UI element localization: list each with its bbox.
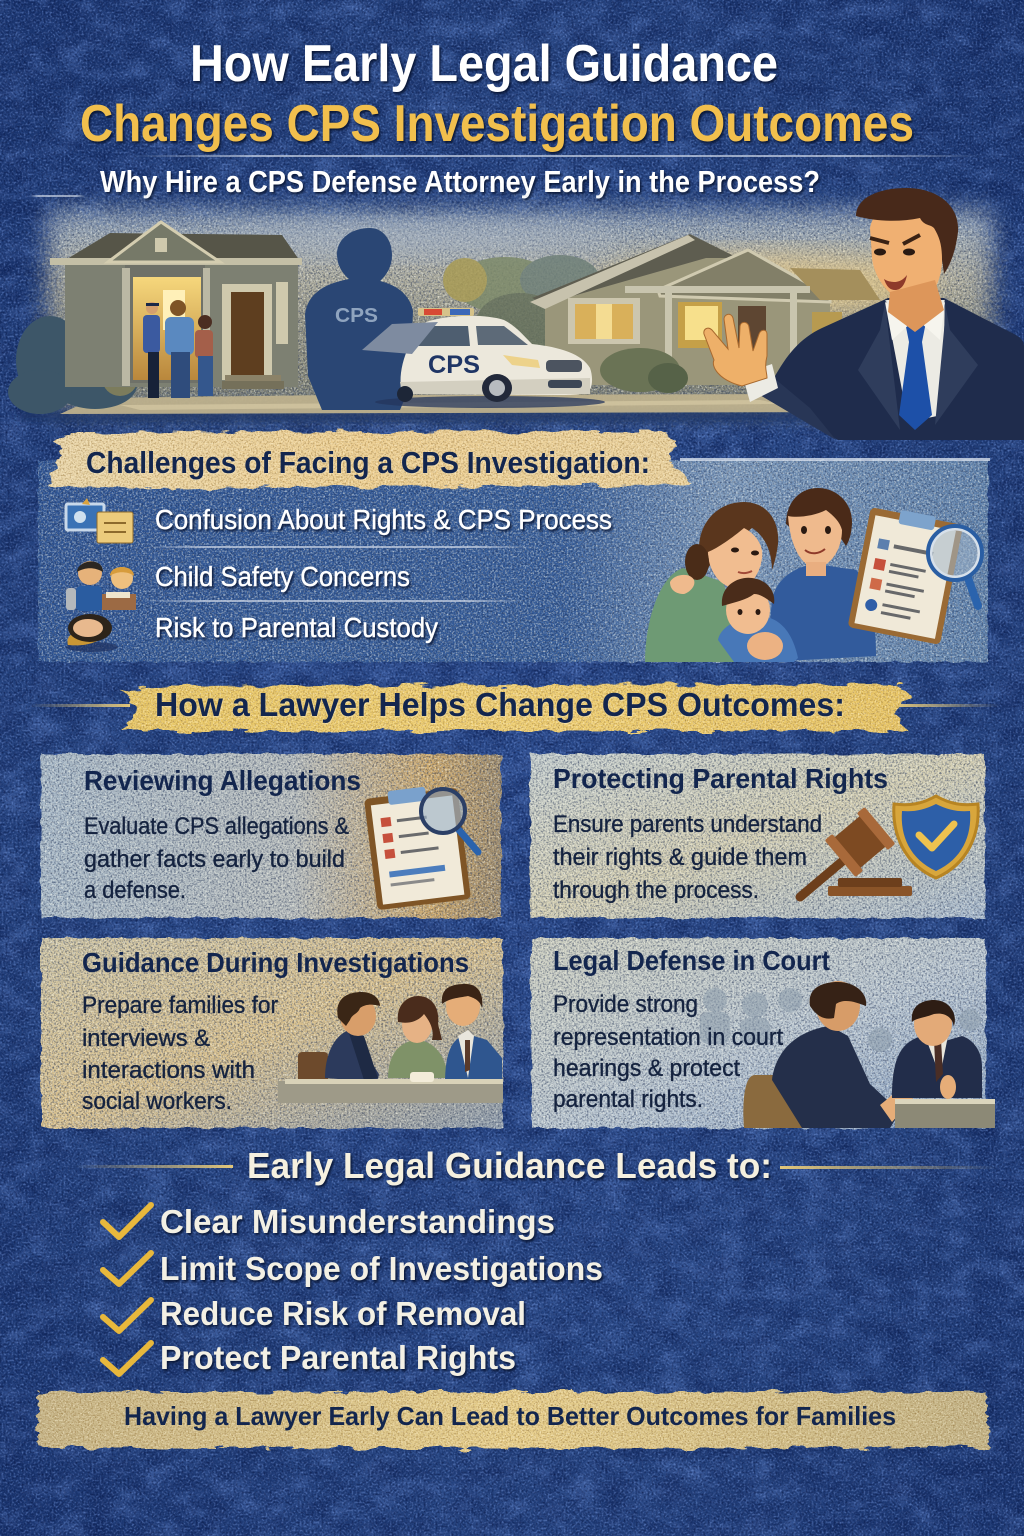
mother: [645, 502, 778, 662]
bushes left: [8, 316, 138, 414]
checklist of outcomes: [103, 1203, 603, 1376]
icon: parent and child: [66, 561, 136, 611]
card body: parental rights.: [553, 1086, 703, 1113]
card body: interactions with: [82, 1057, 255, 1084]
title: How Early Legal Guidance: [190, 35, 778, 93]
card body: a defense.: [84, 877, 186, 904]
icon: documents: [66, 498, 133, 543]
icon: shield with check: [894, 796, 978, 878]
card: legal defense in court: [531, 938, 995, 1128]
card body: Ensure parents understand: [553, 811, 822, 838]
house right: [530, 234, 880, 393]
card heading: Guidance During Investigations: [82, 947, 469, 978]
panel: challenges: [38, 431, 990, 662]
icon: clipboard with magnifier: [363, 783, 478, 910]
how a lawyer helps banner: How a Lawyer Helps Change CPS Outcomes:: [155, 686, 845, 723]
three figures at the door: [143, 300, 213, 398]
card body: interviews &: [82, 1025, 210, 1052]
hero sky and ground backdrop: [50, 212, 990, 408]
clipboard: [848, 504, 964, 645]
child: [718, 578, 798, 662]
card body: representation in court: [553, 1024, 783, 1051]
card heading: Protecting Parental Rights: [553, 763, 888, 794]
lawyer hand: [704, 314, 767, 386]
card body: [84, 813, 349, 904]
illustration: courtroom scene: [700, 981, 995, 1128]
card heading: Reviewing Allegations: [84, 765, 361, 796]
challenges panel background: [38, 460, 988, 662]
heading: early legal guidance leads to: Early Legal Guidance Leads to:: [247, 1145, 772, 1186]
card body: through the process.: [553, 877, 759, 904]
card body: [553, 991, 783, 1113]
how a lawyer helps banner: [30, 684, 1000, 731]
icon: hat on stand: [66, 614, 118, 652]
challenge list text: Child Safety Concerns: [155, 561, 410, 592]
panel: hero illustration: [8, 188, 1024, 440]
check item: reduce risk: Reduce Risk of Removal: [160, 1295, 526, 1332]
father: [766, 488, 876, 662]
silhouette with CPS label: [305, 228, 413, 410]
trees behind: [443, 255, 600, 357]
card: guidance during investigations: [41, 938, 503, 1128]
challenges banner: Challenges of Facing a CPS Investigation:: [86, 445, 650, 480]
card body: gather facts early to build: [84, 846, 345, 873]
card body: Prepare families for: [82, 992, 278, 1019]
challenge list text: [155, 504, 612, 643]
card body: [82, 992, 278, 1115]
challenges banner: [48, 431, 690, 488]
house left with door and family: [50, 222, 302, 398]
card body: Evaluate CPS allegations &: [84, 813, 349, 840]
challenge list text: Risk to Parental Custody: [155, 612, 438, 643]
lawyer head: [870, 202, 942, 304]
silhouette with CPS label: CPS: [335, 305, 378, 327]
check item: clear misunderstandings: Clear Misunderstandings: [160, 1203, 555, 1240]
card: reviewing allegations: [41, 754, 501, 918]
check item: limit scope: Limit Scope of Investigations: [160, 1250, 603, 1287]
card heading: Legal Defense in Court: [553, 945, 830, 976]
dark ground strip: [20, 410, 840, 422]
footer banner: [38, 1392, 988, 1448]
card body: hearings & protect: [553, 1055, 740, 1082]
CPS car: [362, 308, 605, 408]
challenge list text: Confusion About Rights & CPS Process: [155, 504, 612, 535]
heading: early legal guidance leads to: [75, 1145, 998, 1186]
CPS car: CPS: [428, 351, 480, 379]
card body: their rights & guide them: [553, 844, 807, 871]
card body: Provide strong: [553, 991, 698, 1018]
illustration: lawyers and mother at a table: [278, 984, 503, 1103]
title: Changes CPS Investigation Outcomes: [80, 95, 914, 153]
card: protecting parental rights: [530, 754, 985, 918]
card body: [553, 811, 822, 904]
card body: social workers.: [82, 1088, 232, 1115]
subtitle: Why Hire a CPS Defense Attorney Early in the Process?: [100, 164, 820, 199]
footer banner: Having a Lawyer Early Can Lead to Better Outcomes for Families: [124, 1401, 896, 1431]
title: [80, 35, 914, 153]
magnifier: [928, 526, 982, 606]
illustration: family with clipboard: [645, 488, 982, 662]
lawyer in suit gesturing: [704, 188, 1024, 440]
icon: gavel: [800, 807, 912, 897]
check item: protect rights: Protect Parental Rights: [160, 1339, 516, 1376]
ground driveway: [60, 394, 840, 414]
